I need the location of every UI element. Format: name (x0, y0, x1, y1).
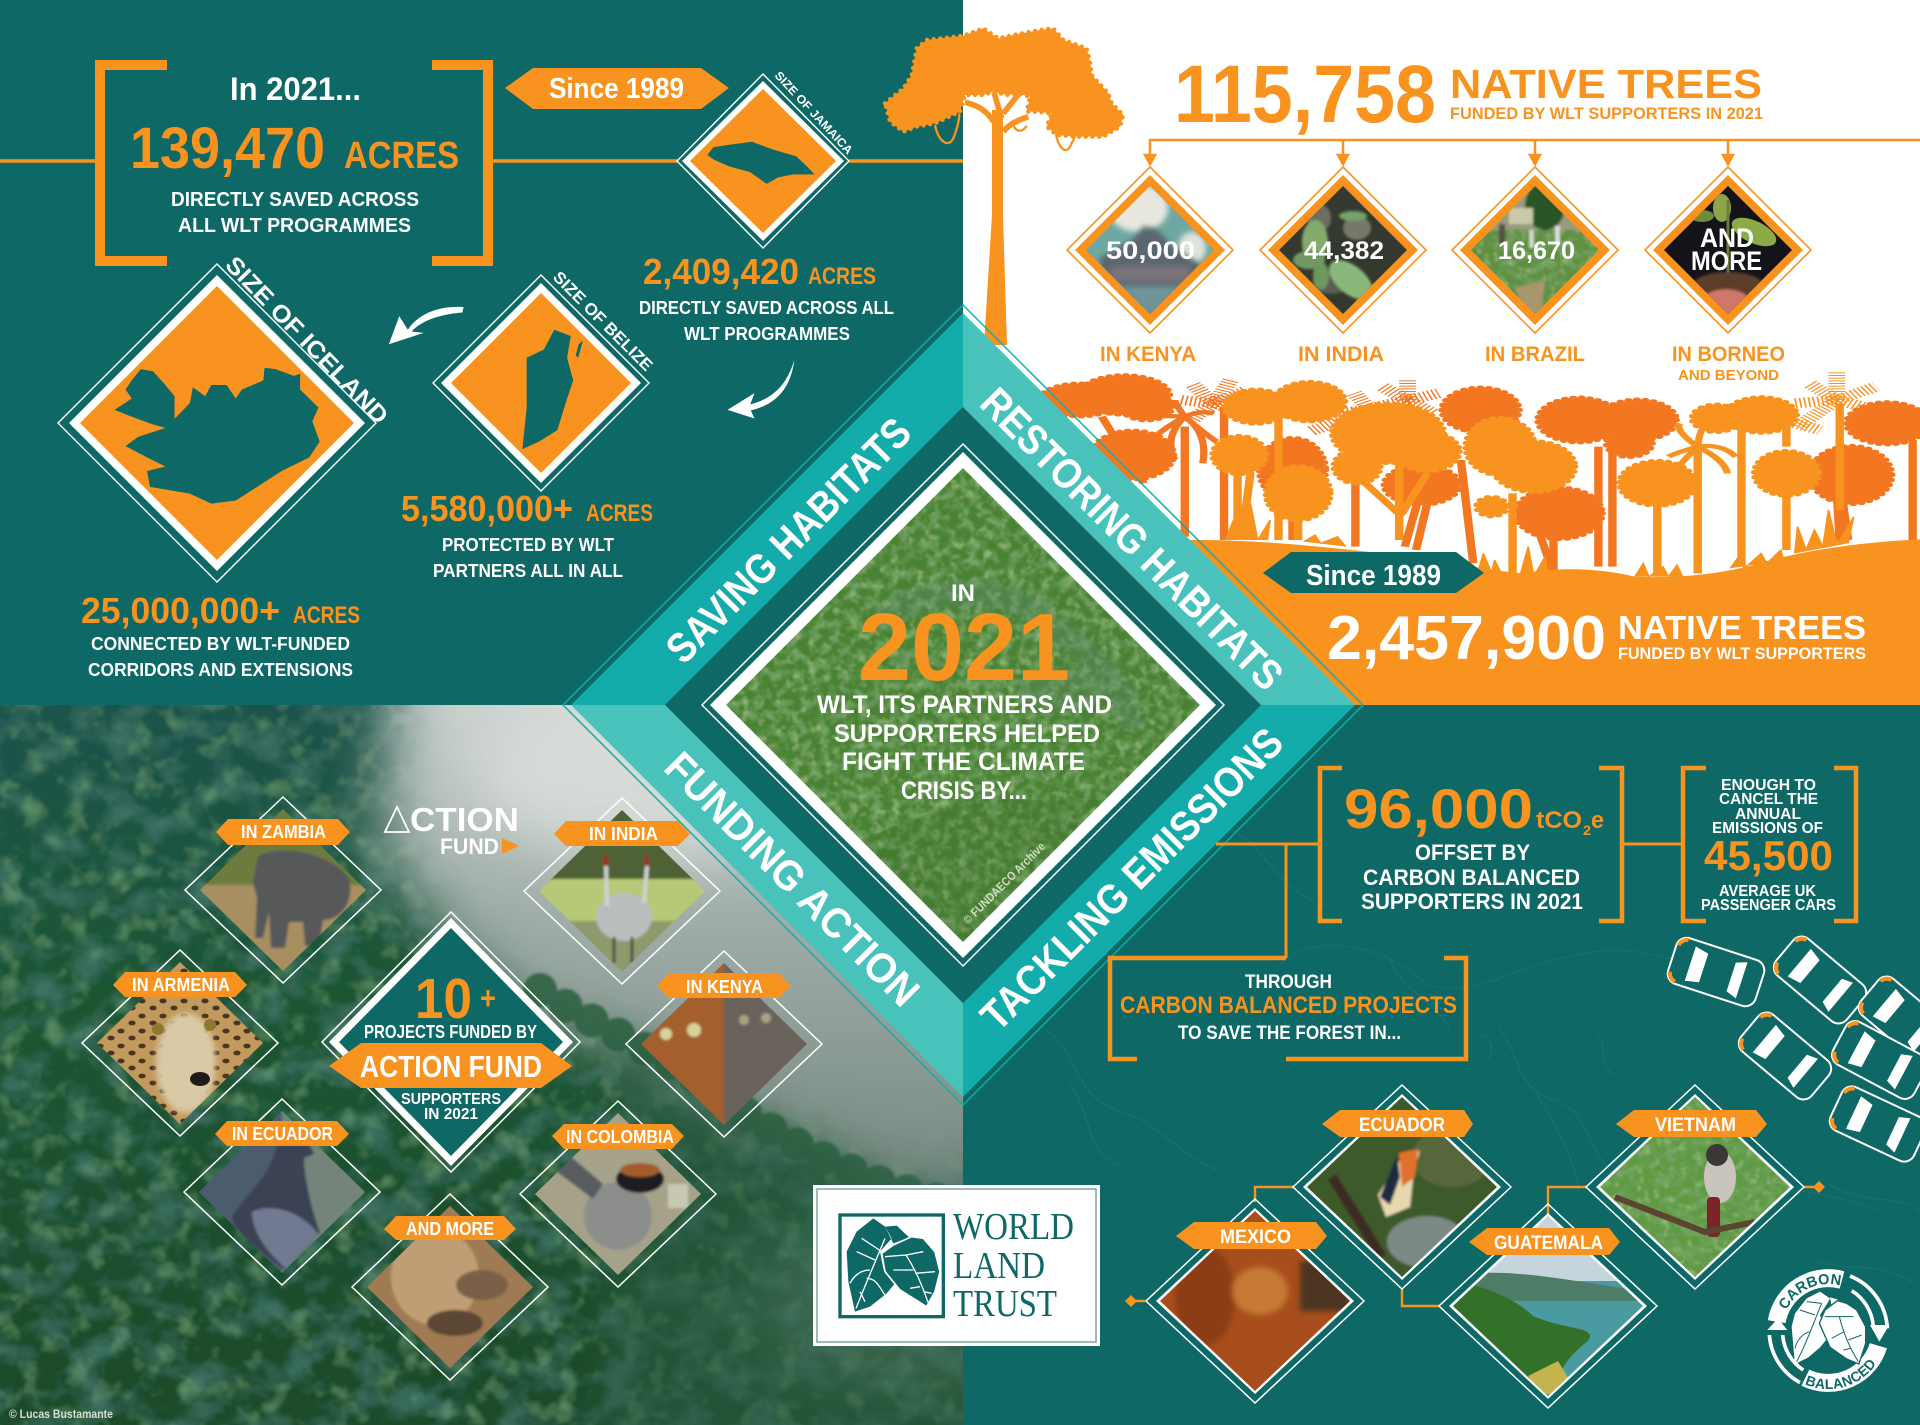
bracket: through carbon balanced projects (1110, 958, 1466, 1059)
heading: In 2021: In 2021... (230, 71, 361, 107)
text: protected by partners (433, 534, 623, 581)
text: protected by partners: PROTECTED BY WLT (442, 534, 615, 555)
stat: 25,000,000+ acres: 25,000,000+ (81, 590, 280, 631)
labels: tree countries: IN INDIA (1298, 343, 1384, 366)
text: central statement (817, 691, 1112, 805)
stat: 2,409,420 acres (643, 251, 876, 292)
bracket: 96,000 tCO2e: CARBON BALANCED (1363, 865, 1580, 890)
white frame (702, 444, 1224, 966)
text (401, 1091, 501, 1123)
tag: IN ARMENIA (132, 975, 230, 995)
bracket: through carbon balanced projects: THROUGH (1245, 972, 1332, 993)
logo: action fund: FUND (440, 834, 499, 859)
bracket: 96,000 tCO2e: tCO (1536, 807, 1582, 834)
text: connected by corridors: CONNECTED BY WLT-FUNDED (91, 633, 350, 654)
wordmark: LAND (953, 1245, 1045, 1287)
text: SUPPORTERS (401, 1091, 501, 1108)
stat: 115,758 native trees: FUNDED BY WLT SUPPORTERS IN 2021 (1450, 104, 1763, 123)
arrow: to Belize (728, 360, 794, 418)
tag: GUATEMALA (1494, 1233, 1603, 1254)
map: Jamaica (707, 142, 814, 184)
bracket: 45,500 cars: AVERAGE UK (1719, 883, 1817, 900)
bracket: 45,500 cars: EMISSIONS OF (1712, 820, 1823, 837)
tag: action fund: ACTION FUND (360, 1049, 542, 1084)
labels: tree countries: IN KENYA (1100, 343, 1196, 366)
band: tackling emissions: TACKLING EMISSIONS (971, 718, 1292, 1040)
text: central statement: WLT, ITS PARTNERS AND (817, 691, 1112, 719)
stat: 115,758 native trees: NATIVE TREES (1450, 61, 1762, 107)
panel: funding action forest photo (0, 705, 963, 1425)
bracket: 96,000 tCO2e: e (1591, 807, 1604, 834)
ground (1096, 539, 1920, 705)
panel: restoring habitats background (963, 0, 1920, 705)
inner dark diamond (665, 407, 1261, 1003)
tag: since 1989 (505, 68, 729, 109)
tag (216, 819, 350, 845)
stat: 5,580,000+ acres: 5,580,000+ (401, 488, 573, 529)
illustration: rainforest silhouette and ground (956, 372, 1920, 707)
diamond: 50,000 in Kenya (1067, 167, 1233, 333)
stat: 2,457,900 native trees: NATIVE TREES (1618, 609, 1866, 646)
text: in: IN (951, 580, 975, 607)
map: Iceland (115, 368, 320, 504)
bracket: 45,500 cars: PASSENGER CARS (1701, 897, 1836, 914)
bracket: 45,500 cars: 45,500 (1704, 832, 1833, 879)
label: size of Jamaica: SIZE OF JAMAICA (772, 68, 856, 157)
band: funding action: FUNDING ACTION (656, 743, 929, 1015)
tag: IN KENYA (686, 977, 763, 997)
arrow: to Iceland (389, 307, 464, 344)
number: 50,000 (1106, 237, 1195, 265)
bracket: 96,000 tCO2e: 96,000 (1344, 777, 1533, 840)
badge: 10+ projects (322, 912, 580, 1172)
stat: 5,580,000+ acres: ACRES (586, 500, 653, 527)
arrow arcs (1769, 1276, 1887, 1383)
stat: 2,457,900 native trees: 2,457,900 (1327, 604, 1606, 673)
tag (1616, 1110, 1767, 1137)
words: AND (1700, 223, 1754, 253)
text: connected by corridors: CORRIDORS AND EXTENSIONS (88, 659, 353, 680)
tag (1469, 1228, 1620, 1255)
stat: 139,470 acres (130, 116, 459, 181)
white text bands (1777, 1278, 1878, 1383)
icon: cars (1665, 932, 1920, 1165)
tag: MEXICO (1220, 1227, 1291, 1248)
labels: tree countries: AND BEYOND (1678, 367, 1779, 384)
leaf emblem (840, 1215, 943, 1317)
band: restoring habitats: RESTORING HABITATS (971, 378, 1293, 699)
project: Mexico (1146, 1199, 1364, 1403)
photo: aerial forest (716, 458, 1210, 952)
project: and more (352, 1194, 548, 1380)
connector: arrows to tree diamonds (1145, 140, 1920, 164)
tag (215, 1121, 349, 1146)
labels: tree countries: IN BRAZIL (1485, 343, 1585, 366)
logo: action fund (385, 801, 519, 859)
tag: IN ZAMBIA (241, 822, 326, 842)
wordmark: WORLD (953, 1206, 1074, 1248)
text: IN 2021 (424, 1106, 478, 1123)
tag (554, 821, 690, 846)
tag: action fund (329, 1043, 572, 1088)
text: connected by corridors (88, 633, 353, 680)
photo credit: © FUNDAECO Archive (960, 839, 1048, 927)
bracket: 96,000 tCO2e: OFFSET BY (1415, 840, 1530, 865)
diamond: size of Belize (433, 268, 656, 491)
project: in Armenia (82, 950, 278, 1136)
stat: 115,758 native trees: 115,758 (1174, 49, 1436, 140)
panel: tackling emissions background (963, 705, 1920, 1425)
logo: action fund: CTION (410, 801, 519, 838)
band: saving habitats: SAVING HABITATS (656, 408, 920, 672)
tag: ECUADOR (1359, 1115, 1445, 1136)
stat: 139,470 acres: ACRES (344, 135, 459, 177)
bracket: 45,500 cars: ENOUGH TO (1721, 777, 1816, 794)
bracket: 45,500 cars: ANNUAL (1735, 806, 1801, 823)
words (1691, 223, 1762, 276)
tag: AND MORE (406, 1219, 494, 1239)
bracket: 45,500 cars: CANCEL THE (1719, 791, 1818, 808)
bracket: 139,470 acres (100, 65, 488, 261)
labels: tree countries: IN BORNEO (1672, 343, 1785, 366)
car (1769, 932, 1871, 1028)
wordmark: TRUST (953, 1283, 1057, 1325)
text: big year 2021: 2021 (858, 594, 1070, 701)
diamond: size of Jamaica (677, 68, 856, 248)
leaf emblem (1792, 1292, 1866, 1364)
project: in India (524, 798, 720, 984)
stat: 139,470 acres: 139,470 (130, 116, 325, 181)
diamond: size of Iceland (58, 251, 393, 582)
tag: VIETNAM (1655, 1115, 1736, 1136)
tag: since 1989: Since 1989 (549, 73, 684, 105)
illustration: large orange tree (885, 28, 1123, 345)
project: Vietnam (1586, 1085, 1804, 1289)
tag (657, 973, 791, 998)
number: 16,670 (1498, 237, 1575, 265)
car (1665, 935, 1767, 1009)
fern palms behind (1180, 372, 1876, 432)
project: in Zambia (185, 797, 381, 983)
diamond: 44,382 in India (1260, 167, 1426, 333)
car (1826, 1083, 1920, 1165)
logo: Carbon Balanced (1767, 1269, 1890, 1392)
text: directly saved: DIRECTLY SAVED ACROSS (171, 189, 419, 211)
text: directly saved (171, 189, 419, 237)
tag: since 1989 trees: Since 1989 (1306, 560, 1441, 592)
bracket: through carbon balanced projects: TO SAVE THE FOREST IN... (1178, 1023, 1401, 1044)
connector: project chain (1125, 1181, 1825, 1307)
text: directly saved across all: DIRECTLY SAVED ACROSS ALL (639, 297, 894, 318)
bracket: through carbon balanced projects: CARBON BALANCED PROJECTS (1120, 992, 1457, 1019)
project: Guatemala (1439, 1204, 1657, 1408)
stat: 2,457,900 native trees: FUNDED BY WLT SUPPORTERS (1618, 644, 1866, 663)
text: central statement: CRISIS BY... (901, 777, 1027, 805)
car (1828, 1017, 1920, 1103)
stat: 115,758 native trees (1174, 49, 1763, 140)
project: Ecuador (1293, 1085, 1511, 1289)
label: size of Iceland: SIZE OF ICELAND (220, 251, 393, 430)
bracket: 96,000 tCO2e (1320, 768, 1622, 921)
words: MORE (1691, 246, 1762, 276)
stat: 2,409,420 acres: ACRES (808, 263, 876, 290)
project: in Ecuador (184, 1099, 380, 1285)
labels: tree countries (1100, 343, 1785, 384)
bracket: 96,000 tCO2e: 2 (1583, 822, 1591, 838)
panel: saving habitats background (0, 0, 963, 705)
text: central statement: SUPPORTERS HELPED (834, 720, 1100, 748)
word: balanced: BALANCED (1806, 1360, 1874, 1390)
number: 44,382 (1304, 237, 1384, 265)
text: directly saved: ALL WLT PROGRAMMES (178, 215, 411, 237)
tag: since 1989 trees (1263, 552, 1484, 593)
tag (384, 1216, 516, 1240)
project: in Colombia (520, 1101, 716, 1287)
tag (1176, 1222, 1327, 1249)
bracket: 96,000 tCO2e: SUPPORTERS IN 2021 (1361, 889, 1583, 914)
text: directly saved across all (639, 297, 894, 344)
bracket: 45,500 cars (1683, 768, 1856, 921)
band: funding action (571, 705, 963, 1097)
photo credit: © Lucas Bustamante (9, 1407, 113, 1421)
stat: 2,409,420 acres: 2,409,420 (643, 251, 799, 292)
tag: IN COLOMBIA (566, 1127, 674, 1147)
text: protected by partners: PARTNERS ALL IN ALL (433, 560, 623, 581)
faint world map contours (1046, 829, 1920, 1285)
map: Belize (522, 330, 583, 449)
stat: 2,457,900 native trees (1327, 604, 1866, 673)
band: saving habitats (571, 313, 963, 705)
car (1734, 1008, 1836, 1104)
tag: IN INDIA (589, 824, 658, 844)
dark trees (1040, 376, 1920, 573)
logo: World Land Trust (813, 1185, 1100, 1346)
number: + (480, 980, 496, 1016)
tag (1322, 1110, 1473, 1137)
tag: IN ECUADOR (232, 1124, 333, 1144)
arrowheads (1767, 1318, 1889, 1342)
stat: 25,000,000+ acres: ACRES (293, 602, 360, 629)
connector: emissions lines (1216, 844, 1681, 958)
label: size of Belize: SIZE OF BELIZE (549, 268, 656, 375)
text: directly saved across all: WLT PROGRAMMES (684, 323, 850, 344)
number: 10 (415, 967, 472, 1031)
text: central statement: FIGHT THE CLIMATE (842, 748, 1085, 776)
diamond: and more in Borneo (1645, 167, 1811, 333)
text: PROJECTS FUNDED BY (364, 1022, 537, 1042)
car (1854, 972, 1920, 1068)
line: timeline across saving habitats (0, 159, 963, 163)
light trees (1213, 382, 1840, 577)
central diamond badge (563, 305, 1363, 1105)
diamond: 16,670 in Brazil (1452, 167, 1618, 333)
project: in Kenya (626, 951, 822, 1137)
wordmark (953, 1206, 1074, 1325)
tag (113, 972, 247, 997)
word: carbon: CARBON (1780, 1274, 1841, 1308)
